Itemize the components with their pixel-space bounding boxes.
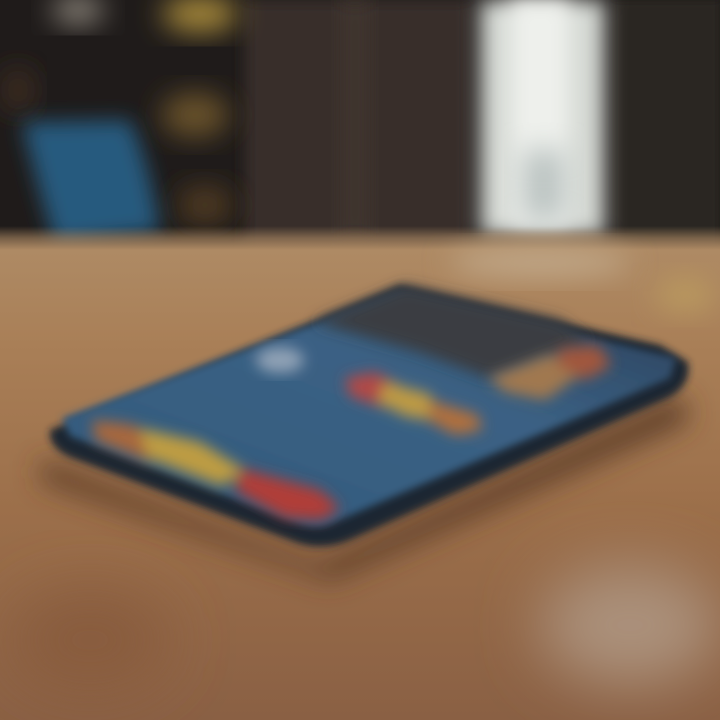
card lower stripe (92, 420, 340, 520)
card upper right badge (488, 345, 612, 400)
background: dark room wall (0, 0, 720, 260)
bright window (480, 0, 605, 236)
card dark panel (315, 285, 590, 378)
card (50, 285, 689, 547)
card middle stripe (345, 372, 482, 435)
blue cushion (22, 120, 160, 244)
shelf items (2, 0, 238, 225)
card shadow (40, 395, 690, 580)
card white logo (256, 347, 304, 373)
card dark edge (50, 285, 689, 547)
wooden table (0, 226, 720, 720)
card face (62, 292, 676, 527)
